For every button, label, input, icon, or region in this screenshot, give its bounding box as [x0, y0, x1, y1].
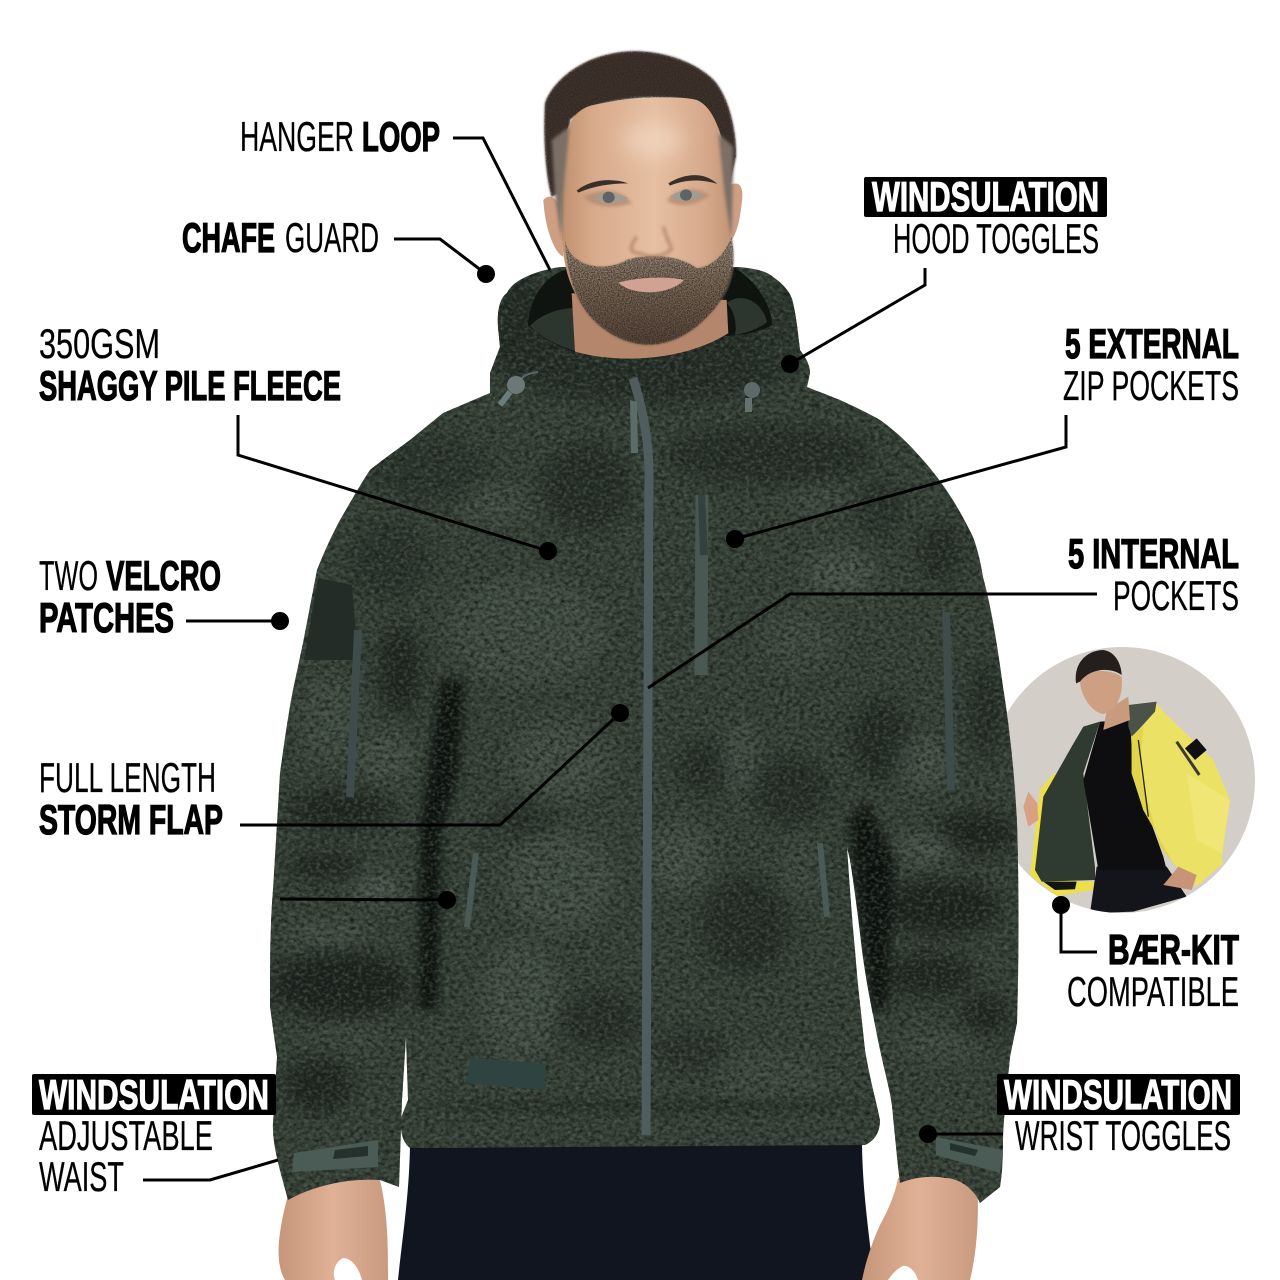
beard: [565, 237, 734, 345]
hand: left: [279, 1174, 388, 1280]
inset: baer-kit jacket: [989, 647, 1255, 913]
callout: chafe guard: GUARD: [285, 214, 379, 261]
cuff tab: right: [936, 1137, 1003, 1173]
fur texture: [250, 250, 1040, 1220]
callout: chafe guard: CHAFE: [182, 214, 275, 261]
cuff tab: left: [292, 1140, 378, 1172]
eyebrows: [577, 175, 717, 193]
hand pocket zips: [467, 843, 827, 927]
callout: storm flap: [39, 704, 629, 843]
dark gaps between arm and body: [415, 680, 895, 1109]
pupils: [603, 189, 692, 203]
inset background: [989, 647, 1255, 913]
callout: shaggy pile fleece: 350GSM: [39, 320, 160, 367]
sleeve pocket zips: [350, 612, 951, 797]
callout: windsulation hood toggles: [781, 173, 1107, 373]
eyes: [593, 191, 703, 203]
callout: hanger loop: [240, 113, 550, 270]
callout: internal pockets: [648, 530, 1239, 688]
ears: [543, 184, 742, 257]
callout: windsulation adjustable waist: [32, 1071, 278, 1200]
callout: external zip pockets: [726, 320, 1239, 548]
callout: velcro patches: PATCHES: [39, 594, 174, 641]
zipper: [633, 378, 649, 1135]
callout: windsulation adjustable waist: ADJUSTABLE: [39, 1112, 213, 1159]
callout: windsulation wrist toggles: [919, 1071, 1240, 1159]
callout: velcro patches: VELCRO: [106, 552, 221, 599]
face: [561, 97, 731, 341]
callout: pocket marker: [280, 891, 456, 909]
hair: [544, 51, 736, 197]
forehead highlight: [623, 123, 683, 157]
zipper pull: [630, 400, 638, 453]
eye sockets: [583, 189, 710, 206]
chest pocket zip: [698, 495, 708, 675]
logo patch: [467, 1058, 546, 1090]
callout: baer-kit compatible: [1052, 896, 1239, 1015]
callout: hanger loop: HANGER: [240, 113, 354, 160]
hood lining: [530, 298, 767, 351]
velcro patch: [304, 578, 358, 660]
callout: windsulation adjustable waist: WINDSULATION: [39, 1071, 269, 1118]
jacket: [250, 250, 1040, 1220]
callout: hanger loop: LOOP: [362, 113, 440, 160]
head: [543, 51, 742, 359]
callout: windsulation hood toggles: HOOD TOGGLES: [893, 215, 1099, 262]
hood toggles: [500, 372, 760, 412]
callout: windsulation hood toggles: WINDSULATION: [872, 173, 1099, 220]
callout: storm flap: FULL LENGTH: [39, 754, 216, 801]
lips: [618, 278, 684, 292]
pants: [398, 1140, 874, 1280]
hood interior: [528, 268, 772, 352]
hair sideburn grey: [552, 127, 733, 240]
callout: velcro patches: [39, 552, 289, 641]
callout: velcro patches: TWO: [39, 552, 98, 599]
hand: right: [862, 1172, 978, 1280]
nose shadow: [631, 227, 672, 256]
callout: windsulation adjustable waist: WAIST: [39, 1153, 124, 1200]
neck: [572, 293, 728, 359]
fleece shading blotches: [270, 270, 1015, 1151]
callout: storm flap: STORM FLAP: [39, 796, 223, 843]
callout: shaggy pile fleece: SHAGGY PILE FLEECE: [39, 362, 341, 409]
callout: chafe guard: [182, 214, 495, 283]
callout: shaggy pile fleece: [39, 320, 557, 560]
